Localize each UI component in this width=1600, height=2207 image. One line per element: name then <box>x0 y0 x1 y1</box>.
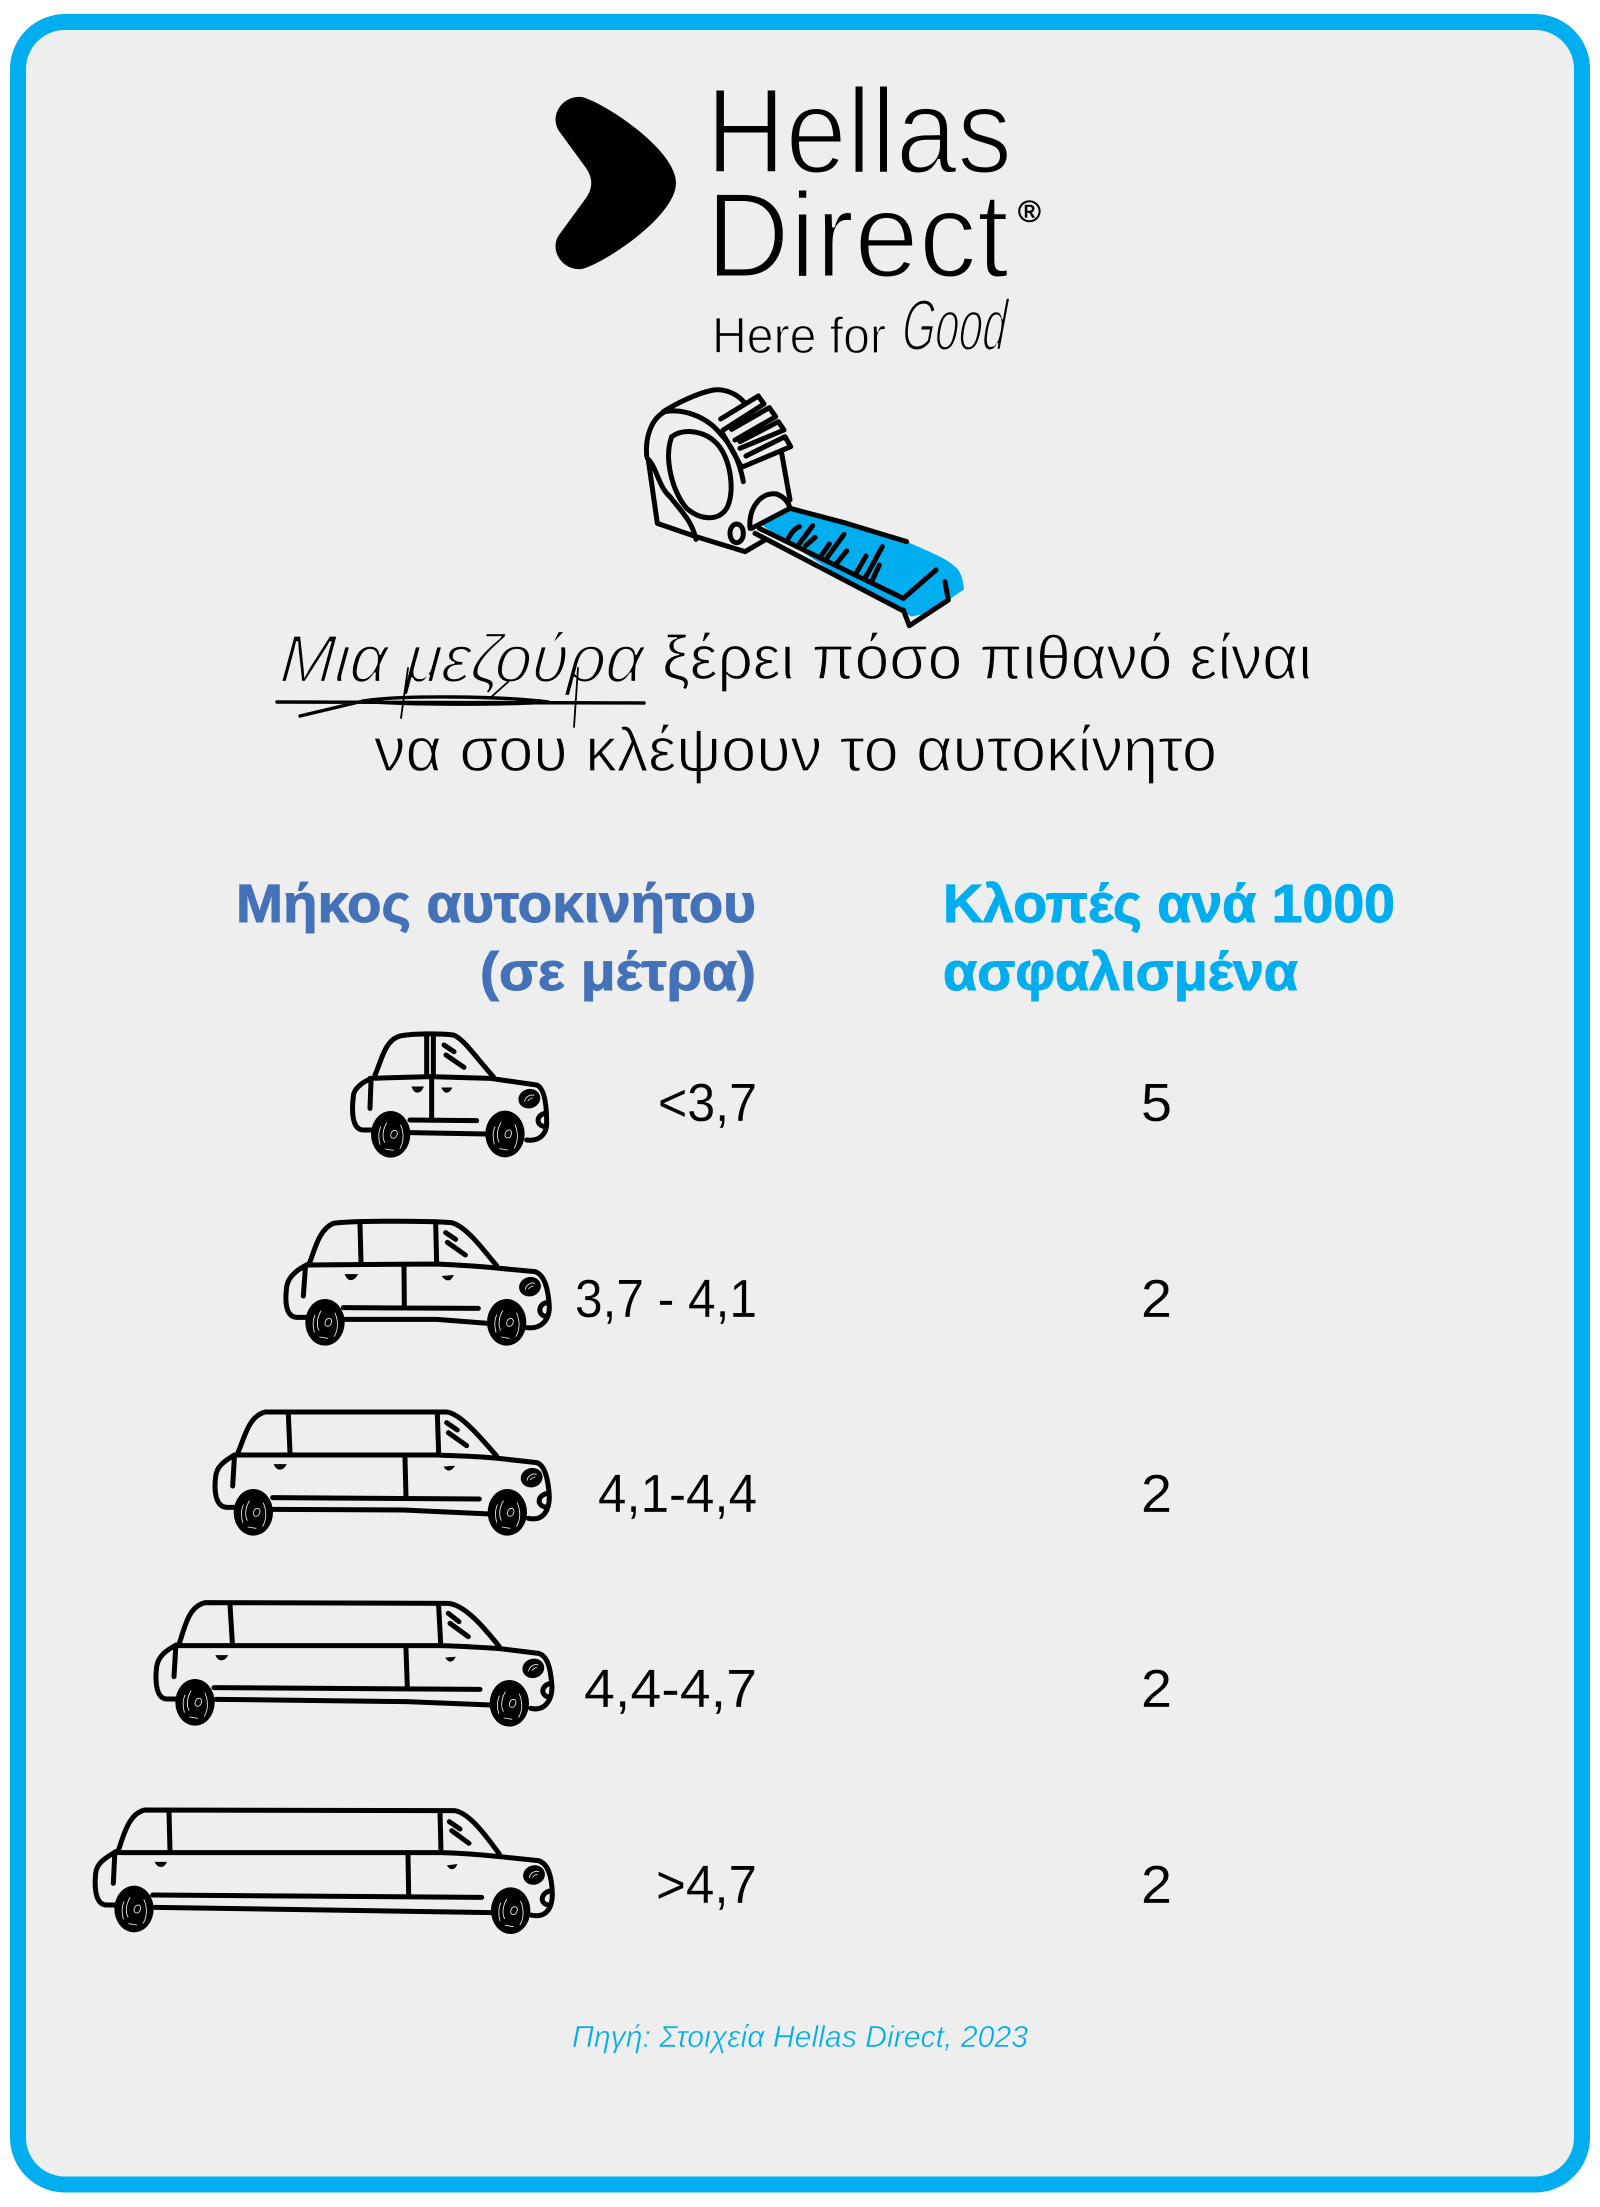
row 4: length range: 4,4-4,7 <box>584 1659 757 1719</box>
headline line two: να σου κλέψουν το αυτοκίνητο <box>374 716 1217 785</box>
row 2: length range: 3,7 - 4,1 <box>575 1269 757 1329</box>
icon: boomerang logo mark <box>556 97 676 269</box>
row 1: car icon, shortest <box>353 1034 547 1158</box>
tagline: Good handwritten: Good <box>900 286 1011 366</box>
row 5: car icon, longest <box>95 1810 552 1934</box>
row 1: thefts value: 5 <box>1141 1073 1172 1133</box>
tape measure outlines <box>646 390 948 626</box>
column heading: thefts per 1000 insured: ασφαλισμένα <box>943 942 1298 1002</box>
headline line one: ξέρει πόσο πιθανό είναι <box>662 624 1312 693</box>
tape blade blue fill <box>762 510 964 617</box>
column heading: thefts per 1000 insured <box>943 874 1395 1002</box>
handwritten words with underline <box>277 620 649 727</box>
registered mark: ® <box>1018 194 1041 229</box>
icon: tape measure <box>646 390 964 626</box>
column heading: car length: Μήκος αυτοκινήτου <box>236 874 756 934</box>
headline <box>277 620 1312 785</box>
row 3: thefts value: 2 <box>1141 1464 1172 1524</box>
row 3: car icon <box>215 1412 549 1536</box>
row 3: length range: 4,1-4,4 <box>598 1464 757 1524</box>
row 5: thefts value: 2 <box>1141 1855 1172 1915</box>
row 4: thefts value: 2 <box>1141 1659 1172 1719</box>
row 1: length range: <3,7 <box>658 1073 757 1133</box>
row 2: car icon <box>286 1221 549 1346</box>
handwritten words with underline: Μια μεζούρα <box>278 620 649 697</box>
row 4: car icon <box>156 1603 552 1727</box>
row 2: thefts value: 2 <box>1141 1269 1172 1329</box>
column heading: car length: (σε μέτρα) <box>480 942 756 1002</box>
wordmark: Hellas: Hellas <box>706 63 1012 199</box>
logo: Hellas Direct <box>556 63 1041 366</box>
source note: Πηγή: Στοιχεία Hellas Direct, 2023 <box>572 2019 1028 2054</box>
column heading: thefts per 1000 insured: Κλοπές ανά 1000 <box>943 874 1395 934</box>
row 5: length range: >4,7 <box>656 1855 757 1915</box>
tagline: Here for: Here for <box>712 307 886 364</box>
wordmark: Direct: Direct <box>706 167 1009 303</box>
column heading: car length <box>236 874 756 1002</box>
